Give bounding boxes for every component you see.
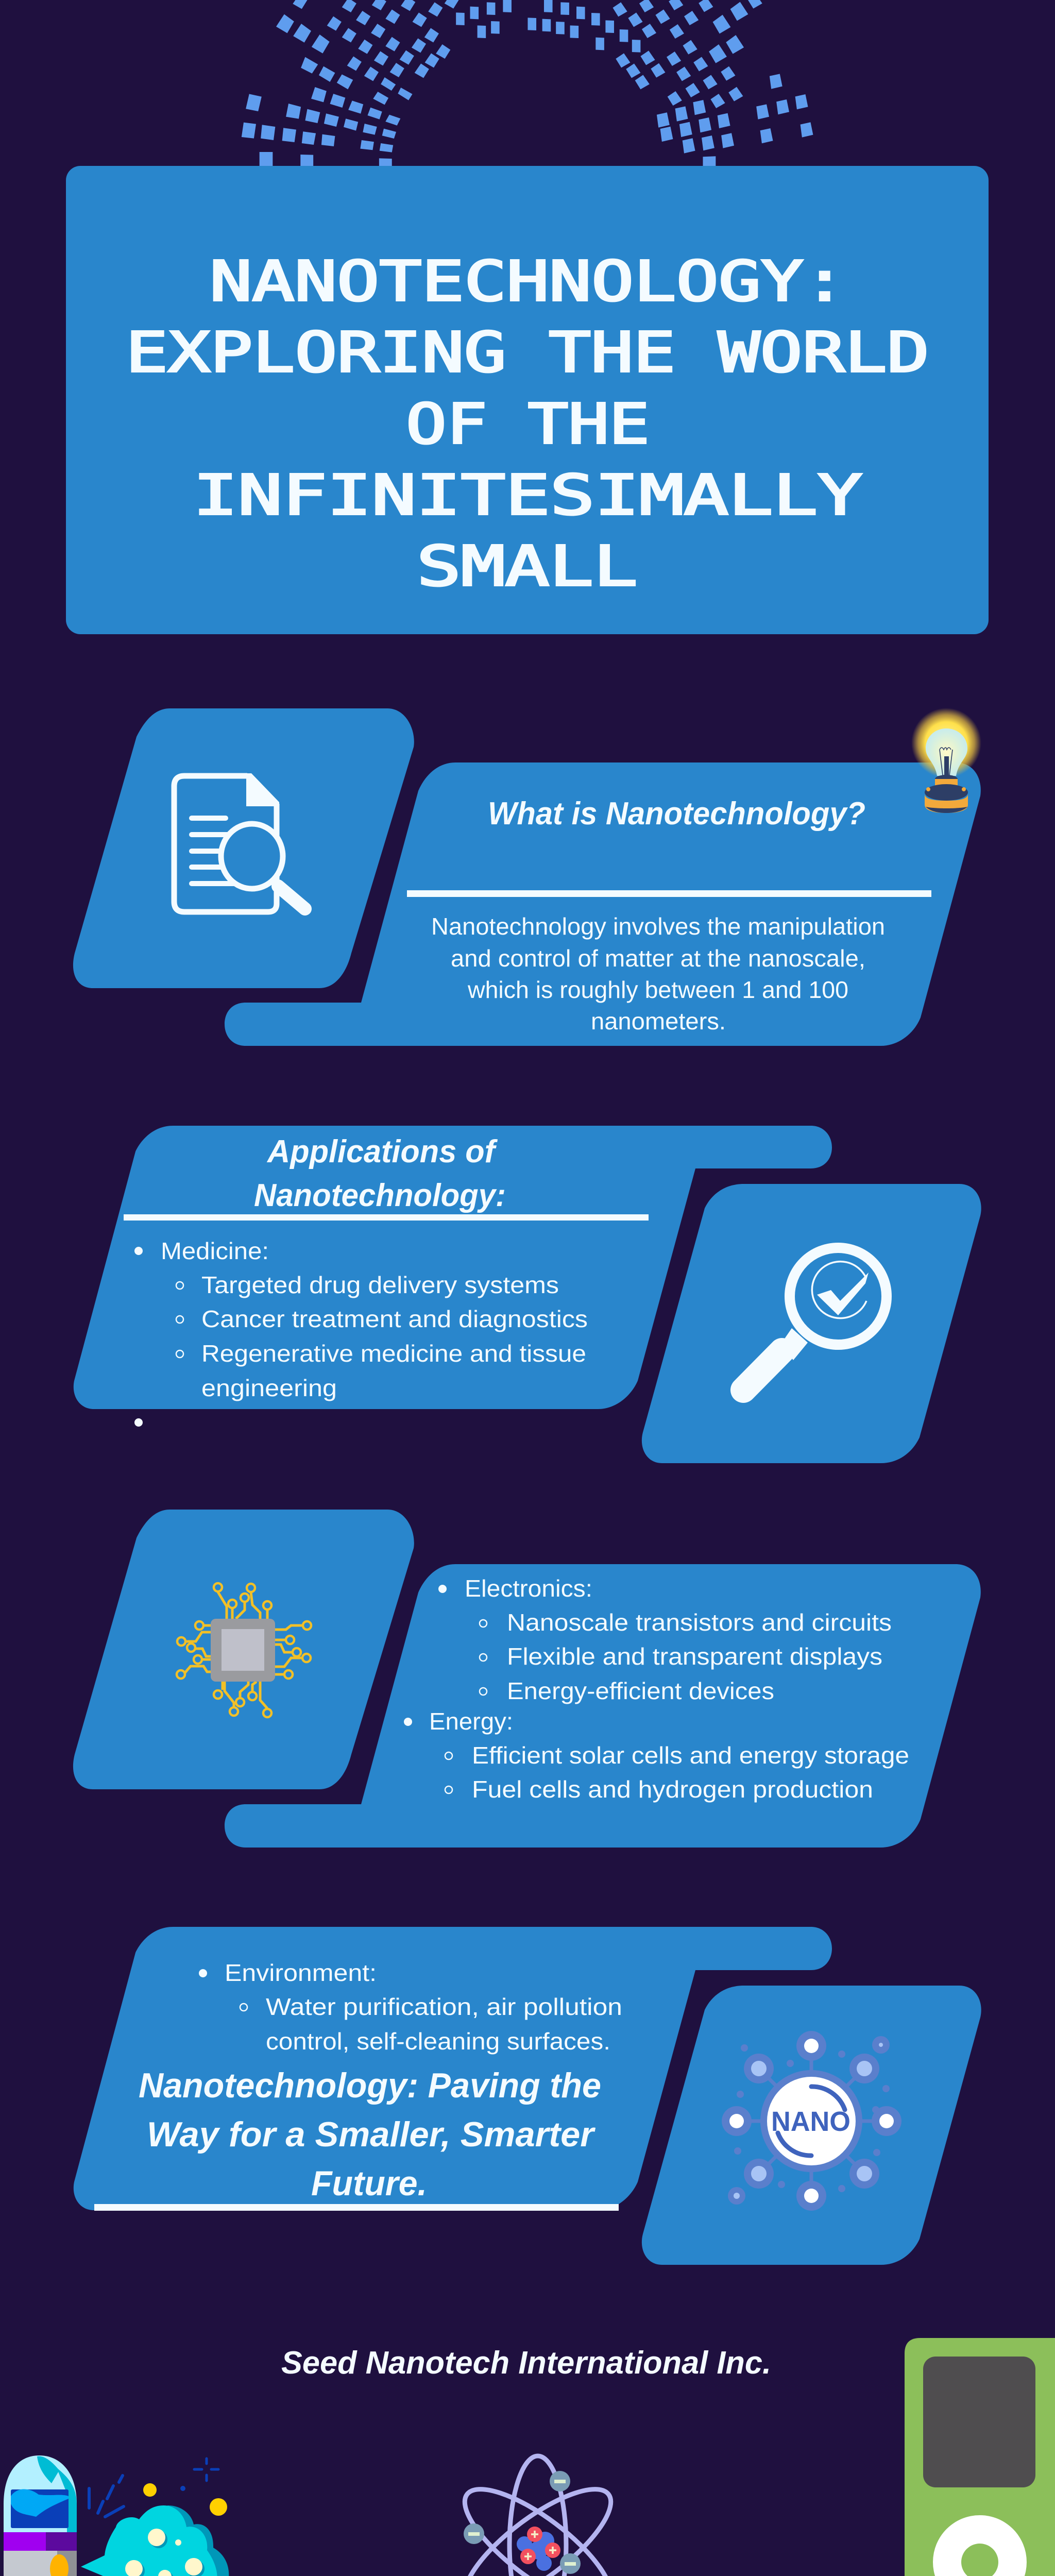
icon: glowing light bulb bbox=[911, 708, 981, 813]
list: environment: Water purification, air pollution bbox=[266, 1993, 622, 2020]
list: medicine: Medicine: bbox=[161, 1238, 269, 1264]
list: medicine: engineering bbox=[201, 1375, 337, 1401]
list: medicine: Cancer treatment and diagnostics bbox=[201, 1306, 588, 1332]
list: environment: control, self-cleaning surfaces. bbox=[266, 2028, 610, 2055]
icon: nano network bbox=[722, 2031, 901, 2211]
company name: Seed Nanotech International Inc. bbox=[281, 2345, 771, 2381]
rule bbox=[94, 2204, 619, 2211]
rule bbox=[407, 890, 931, 897]
panel: environment and closing statement bbox=[74, 1927, 832, 2211]
icon: circuit chip bbox=[177, 1583, 311, 1717]
list: medicine: Targeted drug delivery systems bbox=[201, 1272, 559, 1298]
nano label: NANO bbox=[771, 2106, 850, 2137]
title text: EXPLORING THE WORLD bbox=[126, 321, 929, 385]
heading: applications bbox=[254, 1134, 506, 1213]
list: electronics and energy: Electronics: bbox=[465, 1575, 592, 1602]
closing statement bbox=[139, 2066, 601, 2203]
panel: applications of nanotechnology bbox=[74, 1126, 832, 1427]
heading: what is nanotechnology: What is Nanotechnology? bbox=[488, 796, 865, 832]
text block: definition: and control of matter at the nanoscale, bbox=[451, 945, 865, 972]
illustration: blue cloud with particles bbox=[81, 2459, 229, 2576]
text block: definition: Nanotechnology involves the manipulation bbox=[431, 913, 885, 940]
closing statement: Way for a Smaller, Smarter bbox=[147, 2115, 596, 2154]
panel: electronics and energy bbox=[225, 1564, 981, 1848]
list: electronics and energy bbox=[404, 1575, 909, 1803]
panel: nano card bbox=[642, 1986, 981, 2265]
heading: applications: Nanotechnology: bbox=[254, 1178, 506, 1213]
title text: INFINITESIMALLY bbox=[193, 464, 862, 528]
panel: chip card bbox=[73, 1510, 414, 1789]
list: electronics and energy: Nanoscale transistors and circuits bbox=[507, 1609, 892, 1636]
list: electronics and energy: Flexible and transparent displays bbox=[507, 1643, 882, 1670]
list: environment bbox=[199, 1959, 622, 2055]
heading: applications: Applications of bbox=[266, 1134, 498, 1170]
list: electronics and energy: Energy-efficient devices bbox=[507, 1677, 774, 1704]
list: electronics and energy: Energy: bbox=[429, 1708, 513, 1735]
list: medicine bbox=[134, 1238, 588, 1427]
text block: definition: nanometers. bbox=[591, 1008, 726, 1035]
list: electronics and energy: Fuel cells and hydrogen production bbox=[472, 1776, 873, 1803]
panel: document icon card bbox=[73, 708, 414, 988]
list: medicine: Regenerative medicine and tissue bbox=[201, 1340, 586, 1367]
icon: document with magnifier bbox=[174, 773, 305, 912]
illustration: green device bbox=[905, 2338, 1055, 2576]
rule bbox=[124, 1214, 649, 1221]
title panel bbox=[66, 166, 989, 634]
closing statement: Future. bbox=[311, 2164, 427, 2203]
title text bbox=[126, 250, 929, 599]
closing statement: Nanotechnology: Paving the bbox=[139, 2066, 601, 2105]
list: electronics and energy: Efficient solar cells and energy storage bbox=[472, 1742, 909, 1769]
panel: magnifier card bbox=[642, 1184, 981, 1463]
illustration: capsule bbox=[4, 2455, 77, 2576]
title text: OF THE bbox=[406, 393, 650, 456]
text block: definition bbox=[431, 913, 885, 1035]
icon: magnifier with check bbox=[743, 1248, 887, 1390]
decorative dot arc pattern bbox=[242, 0, 813, 166]
text block: definition: which is roughly between 1 and 100 bbox=[467, 976, 848, 1003]
title text: NANOTECHNOLOGY: bbox=[210, 250, 846, 314]
title text: SMALL bbox=[417, 535, 638, 599]
panel: what is nanotechnology bbox=[225, 762, 981, 1046]
list: environment: Environment: bbox=[225, 1959, 377, 1986]
illustration: atom bbox=[449, 2456, 626, 2576]
